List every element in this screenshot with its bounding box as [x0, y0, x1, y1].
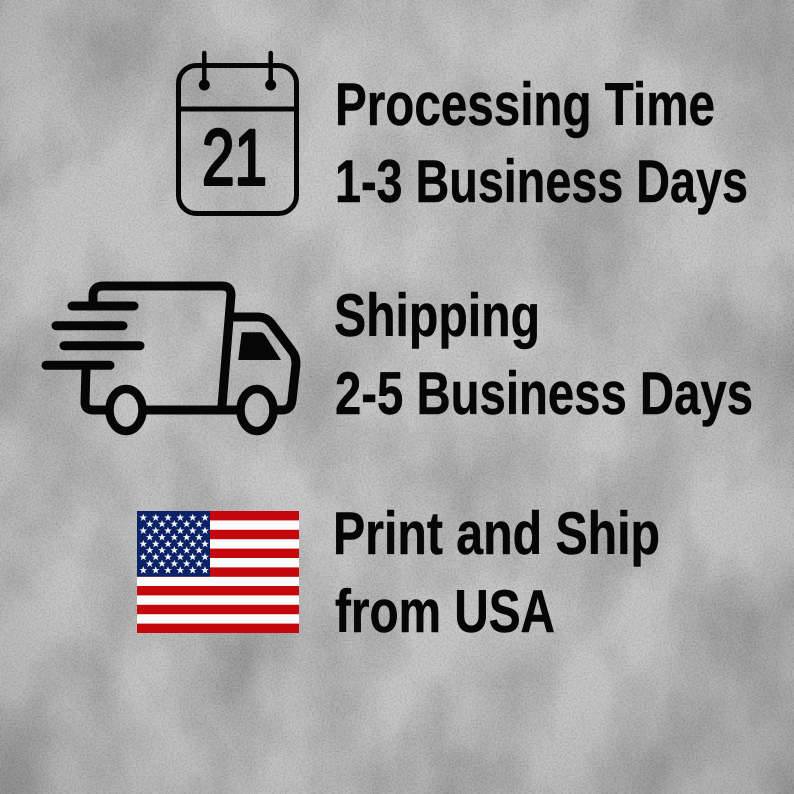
heading: print and ship from USA	[333, 500, 660, 645]
heading: print and ship from USA: from USA	[335, 578, 555, 645]
icon: calendar showing 21: 21	[202, 112, 267, 202]
heading: shipping	[334, 282, 753, 427]
icon: fast delivery truck	[46, 286, 296, 431]
heading: shipping: Shipping	[334, 282, 540, 349]
heading: processing time	[335, 71, 748, 215]
icon: calendar showing 21	[178, 53, 297, 214]
icon: USA flag	[137, 511, 299, 633]
heading: print and ship from USA: Print and Ship	[333, 500, 660, 567]
